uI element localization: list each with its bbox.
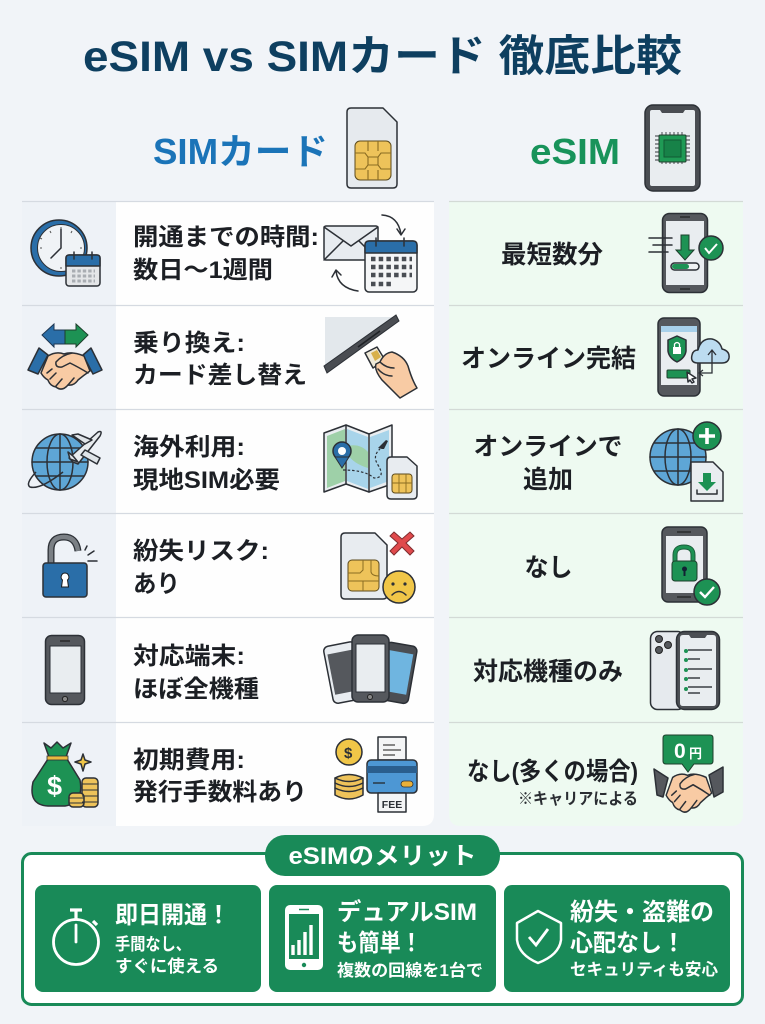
- row: initial cost: [32, 737, 417, 812]
- merits heading pill: [265, 835, 500, 876]
- icon: clock with calendar: [31, 220, 100, 286]
- text: online completion: オンライン完結: [461, 345, 636, 373]
- heading text: SIMカード: SIMカード: [153, 131, 328, 172]
- icon: stopwatch: [54, 910, 98, 964]
- heading text: eSIM: eSIM: [530, 131, 620, 172]
- icon: handshake with zero yen tag: [654, 735, 723, 812]
- panel: eSIM merits: [22, 835, 742, 1004]
- text: activation time: [133, 224, 319, 284]
- card: dual SIM: [269, 885, 496, 992]
- text: add online: オンラインで: [474, 433, 622, 461]
- icon: globe with plane: [28, 432, 101, 490]
- card: same-day activation: [35, 885, 261, 992]
- text: loss risk: あり: [133, 571, 180, 598]
- text: overseas use: [133, 434, 280, 494]
- icon: globe with plus and download: [650, 422, 723, 501]
- card text: すぐに使える: [115, 957, 219, 976]
- icon: SIM card: [347, 108, 397, 188]
- icon: map and SIM: [324, 425, 417, 499]
- text: switching carrier: カード差し替え: [133, 362, 307, 389]
- row: loss risk: [43, 532, 415, 603]
- text: initial cost: [133, 747, 307, 806]
- text: supported devices: [133, 643, 259, 703]
- column heading: SIM card: [153, 108, 397, 188]
- icon: mail and calendar: [324, 215, 417, 292]
- icon: money bag with coins: [32, 742, 98, 807]
- icon: money bag with coins: $: [47, 771, 62, 801]
- text: switching carrier: [133, 330, 307, 389]
- panel frame: [22, 854, 742, 1004]
- icon: hand inserting SIM into phone: [324, 315, 417, 398]
- card text: 複数の回線を1台で: [337, 960, 483, 980]
- text: initial cost: 発行手数料あり: [133, 779, 307, 806]
- text: initial cost: 初期費用:: [133, 747, 245, 774]
- icon: smartphone: [46, 636, 84, 704]
- icon: handshake with zero yen tag: 円: [689, 746, 702, 761]
- card text: 手間なし、: [115, 934, 191, 954]
- card text: [337, 898, 483, 980]
- icon: handshake with zero yen tag: 0: [674, 740, 686, 763]
- icon: phone with embedded chip: [645, 105, 700, 191]
- icon: security shield: [517, 911, 561, 963]
- card: no worry about loss or theft: [504, 885, 730, 992]
- card text: デュアルSIM: [337, 898, 477, 926]
- card text: 即日開通！: [115, 902, 230, 929]
- text: no risk: なし: [524, 554, 572, 582]
- text: overseas use: 海外利用:: [133, 434, 245, 461]
- icon: locked phone with check: [662, 527, 720, 605]
- icon: lost SIM with sad face: [341, 532, 415, 603]
- text: activation time: 数日～1週間: [133, 257, 273, 284]
- icon: dual-view smartphone: [650, 632, 720, 710]
- card text: も簡単！: [337, 930, 422, 957]
- text: add online: [474, 433, 622, 494]
- card text: セキュリティも安心: [570, 960, 718, 979]
- text: no cost: なし(多くの場合): [467, 758, 638, 786]
- text: overseas use: 現地SIM必要: [133, 467, 280, 494]
- panel: eSIM comparison: [449, 201, 743, 826]
- card text: [115, 902, 230, 976]
- text: loss risk: 紛失リスク:: [133, 538, 269, 565]
- text: no cost: [467, 758, 638, 808]
- row: add online: [474, 422, 723, 501]
- card text: [570, 899, 718, 979]
- row: switching carrier: [28, 315, 417, 398]
- merits heading pill: eSIMのメリット: [288, 843, 476, 870]
- text: add online: 追加: [523, 466, 573, 494]
- row: online completion: [461, 318, 729, 396]
- panel text column: [116, 201, 434, 826]
- card text: 心配なし！: [570, 930, 685, 957]
- text: switching carrier: 乗り換え:: [133, 330, 245, 357]
- icon: open padlock: [43, 537, 97, 597]
- icon: coins, card terminal and fee receipt: [335, 737, 417, 812]
- row: activation time: [31, 215, 417, 292]
- text: supported devices: 対応端末:: [133, 643, 245, 670]
- text: loss risk: [133, 538, 269, 598]
- panel: SIM card comparison: [22, 201, 434, 826]
- row: supported models only: [473, 632, 720, 710]
- text: shortest minutes: 最短数分: [501, 241, 603, 269]
- icon: coins, card terminal and fee receipt: FEE: [382, 799, 402, 811]
- text: activation time: 開通までの時間:: [133, 224, 319, 251]
- panel background: [22, 201, 434, 826]
- text: supported devices: ほぼ全機種: [133, 676, 259, 703]
- icon: phone with shield and cloud: [658, 318, 729, 396]
- row: overseas use: [28, 425, 417, 499]
- row: no cost: [467, 735, 723, 812]
- icon: handshake with arrows: [28, 324, 102, 389]
- icon: phone with signal bars: [285, 905, 323, 970]
- row: shortest minutes: [501, 214, 723, 292]
- card text: 紛失・盗難の: [570, 899, 714, 926]
- column heading: eSIM: [530, 105, 700, 191]
- row: no risk: [524, 527, 720, 605]
- panel background: [449, 201, 743, 826]
- icon: three phones: [323, 635, 418, 704]
- text: no cost: ※キャリアによる: [518, 790, 638, 808]
- title: eSIM vs SIMカード 徹底比較: [83, 33, 682, 81]
- text: supported models only: 対応機種のみ: [473, 658, 623, 686]
- row: supported devices: [46, 635, 418, 704]
- icon: phone download complete: [649, 214, 723, 292]
- icon: coins, card terminal and fee receipt: $: [344, 745, 353, 762]
